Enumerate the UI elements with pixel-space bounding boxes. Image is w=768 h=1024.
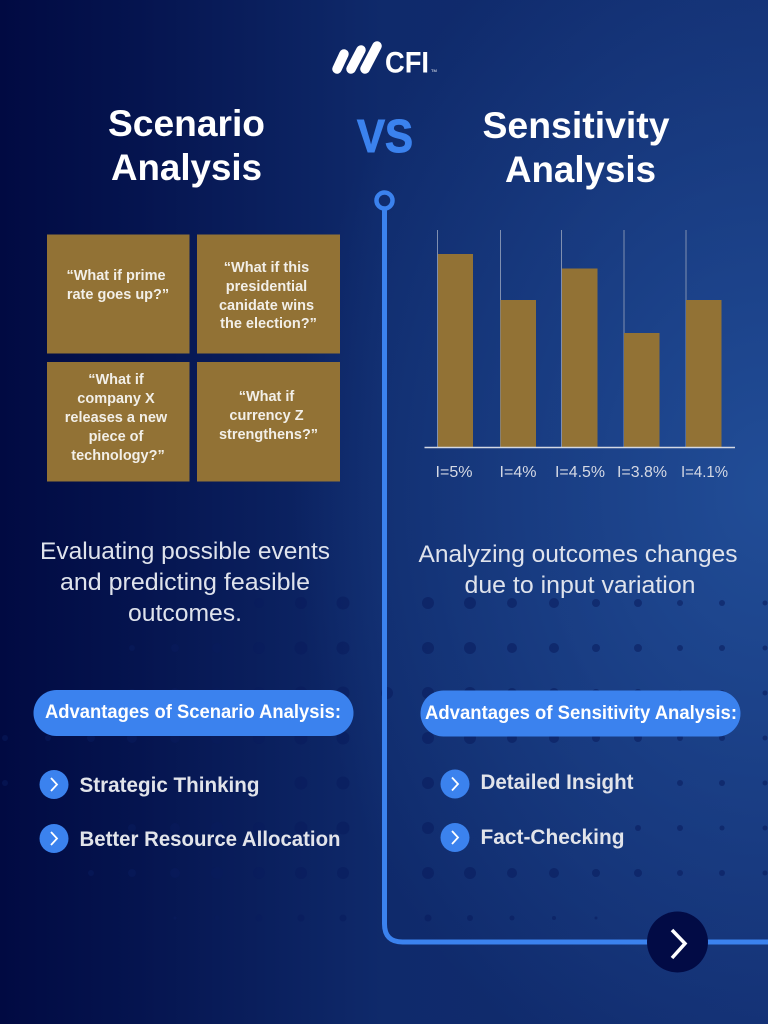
advantages pill: sensitivity: Advantages of Sensitivity Analysis: [425, 703, 737, 724]
text: scenario description: outcomes. [128, 600, 242, 627]
card: company X: company X [77, 391, 155, 407]
text: scenario description [40, 538, 330, 627]
bar chart: sensitivity [424, 230, 735, 481]
title: Sensitivity Analysis [482, 105, 670, 190]
text: sensitivity description [418, 541, 738, 599]
card: company X: releases a new [65, 410, 168, 426]
text: scenario description: and predicting feasible [60, 569, 310, 596]
title: Sensitivity Analysis: Sensitivity [482, 105, 670, 146]
card: presidential candidate: presidential [226, 279, 307, 295]
title: Sensitivity Analysis: Analysis [505, 149, 656, 190]
card: currency Z: “What if [239, 389, 294, 405]
bar chart: sensitivity: I=5% [436, 464, 472, 481]
advantages pill: scenario: Advantages of Scenario Analysis: [45, 702, 341, 723]
text: sensitivity description: Analyzing outcomes changes [418, 541, 738, 568]
card: presidential candidate [197, 234, 340, 354]
card: prime rate: “What if prime [66, 268, 166, 284]
text: scenario description: Evaluating possible events [40, 538, 330, 565]
arrow button: next [647, 912, 708, 972]
item: Better Resource Allocation [40, 824, 340, 853]
heading: VS: VS [357, 110, 413, 162]
title: Scenario Analysis: Analysis [111, 147, 262, 188]
item: Detailed Insight: Detailed Insight [480, 771, 634, 794]
list: sensitivity advantages [440, 770, 634, 852]
card: presidential candidate: canidate wins [219, 298, 314, 314]
advantages pill: sensitivity [420, 690, 740, 736]
panel: scenario question grid [47, 234, 340, 482]
bar chart: sensitivity: I=4% [500, 464, 536, 481]
item: Detailed Insight [440, 770, 634, 798]
card: company X [47, 362, 190, 482]
advantages pill: scenario [34, 690, 354, 736]
card: presidential candidate: the election?” [220, 316, 317, 332]
item: Fact-Checking [440, 823, 624, 852]
timeline connector [376, 192, 768, 942]
card: prime rate: rate goes up?” [67, 287, 169, 303]
list: scenario advantages [40, 770, 340, 853]
bar chart: sensitivity: I=4.1% [681, 464, 728, 481]
card: presidential candidate: “What if this [224, 260, 309, 276]
title: Scenario Analysis: Scenario [108, 103, 265, 144]
bar chart: sensitivity: I=3.8% [617, 464, 667, 481]
card: company X: “What if [88, 372, 144, 388]
title: Scenario Analysis [108, 103, 265, 188]
item: Strategic Thinking [40, 770, 260, 799]
logo: CFI [337, 46, 437, 80]
item: Strategic Thinking: Strategic Thinking [80, 774, 260, 797]
card: company X: technology?” [71, 448, 165, 464]
text: sensitivity description: due to input variation [464, 572, 696, 599]
logo: CFI: CFI [385, 46, 429, 80]
card: company X: piece of [89, 429, 144, 445]
card: prime rate [47, 234, 190, 354]
item: Better Resource Allocation: Better Resource Allocation [80, 828, 340, 851]
card: currency Z [197, 362, 340, 482]
card: currency Z: currency Z [229, 408, 304, 424]
item: Fact-Checking: Fact-Checking [480, 826, 624, 849]
bar chart: sensitivity: I=4.5% [555, 464, 605, 481]
card: currency Z: strengthens?” [219, 427, 318, 443]
logo: CFI: TM [431, 68, 437, 73]
